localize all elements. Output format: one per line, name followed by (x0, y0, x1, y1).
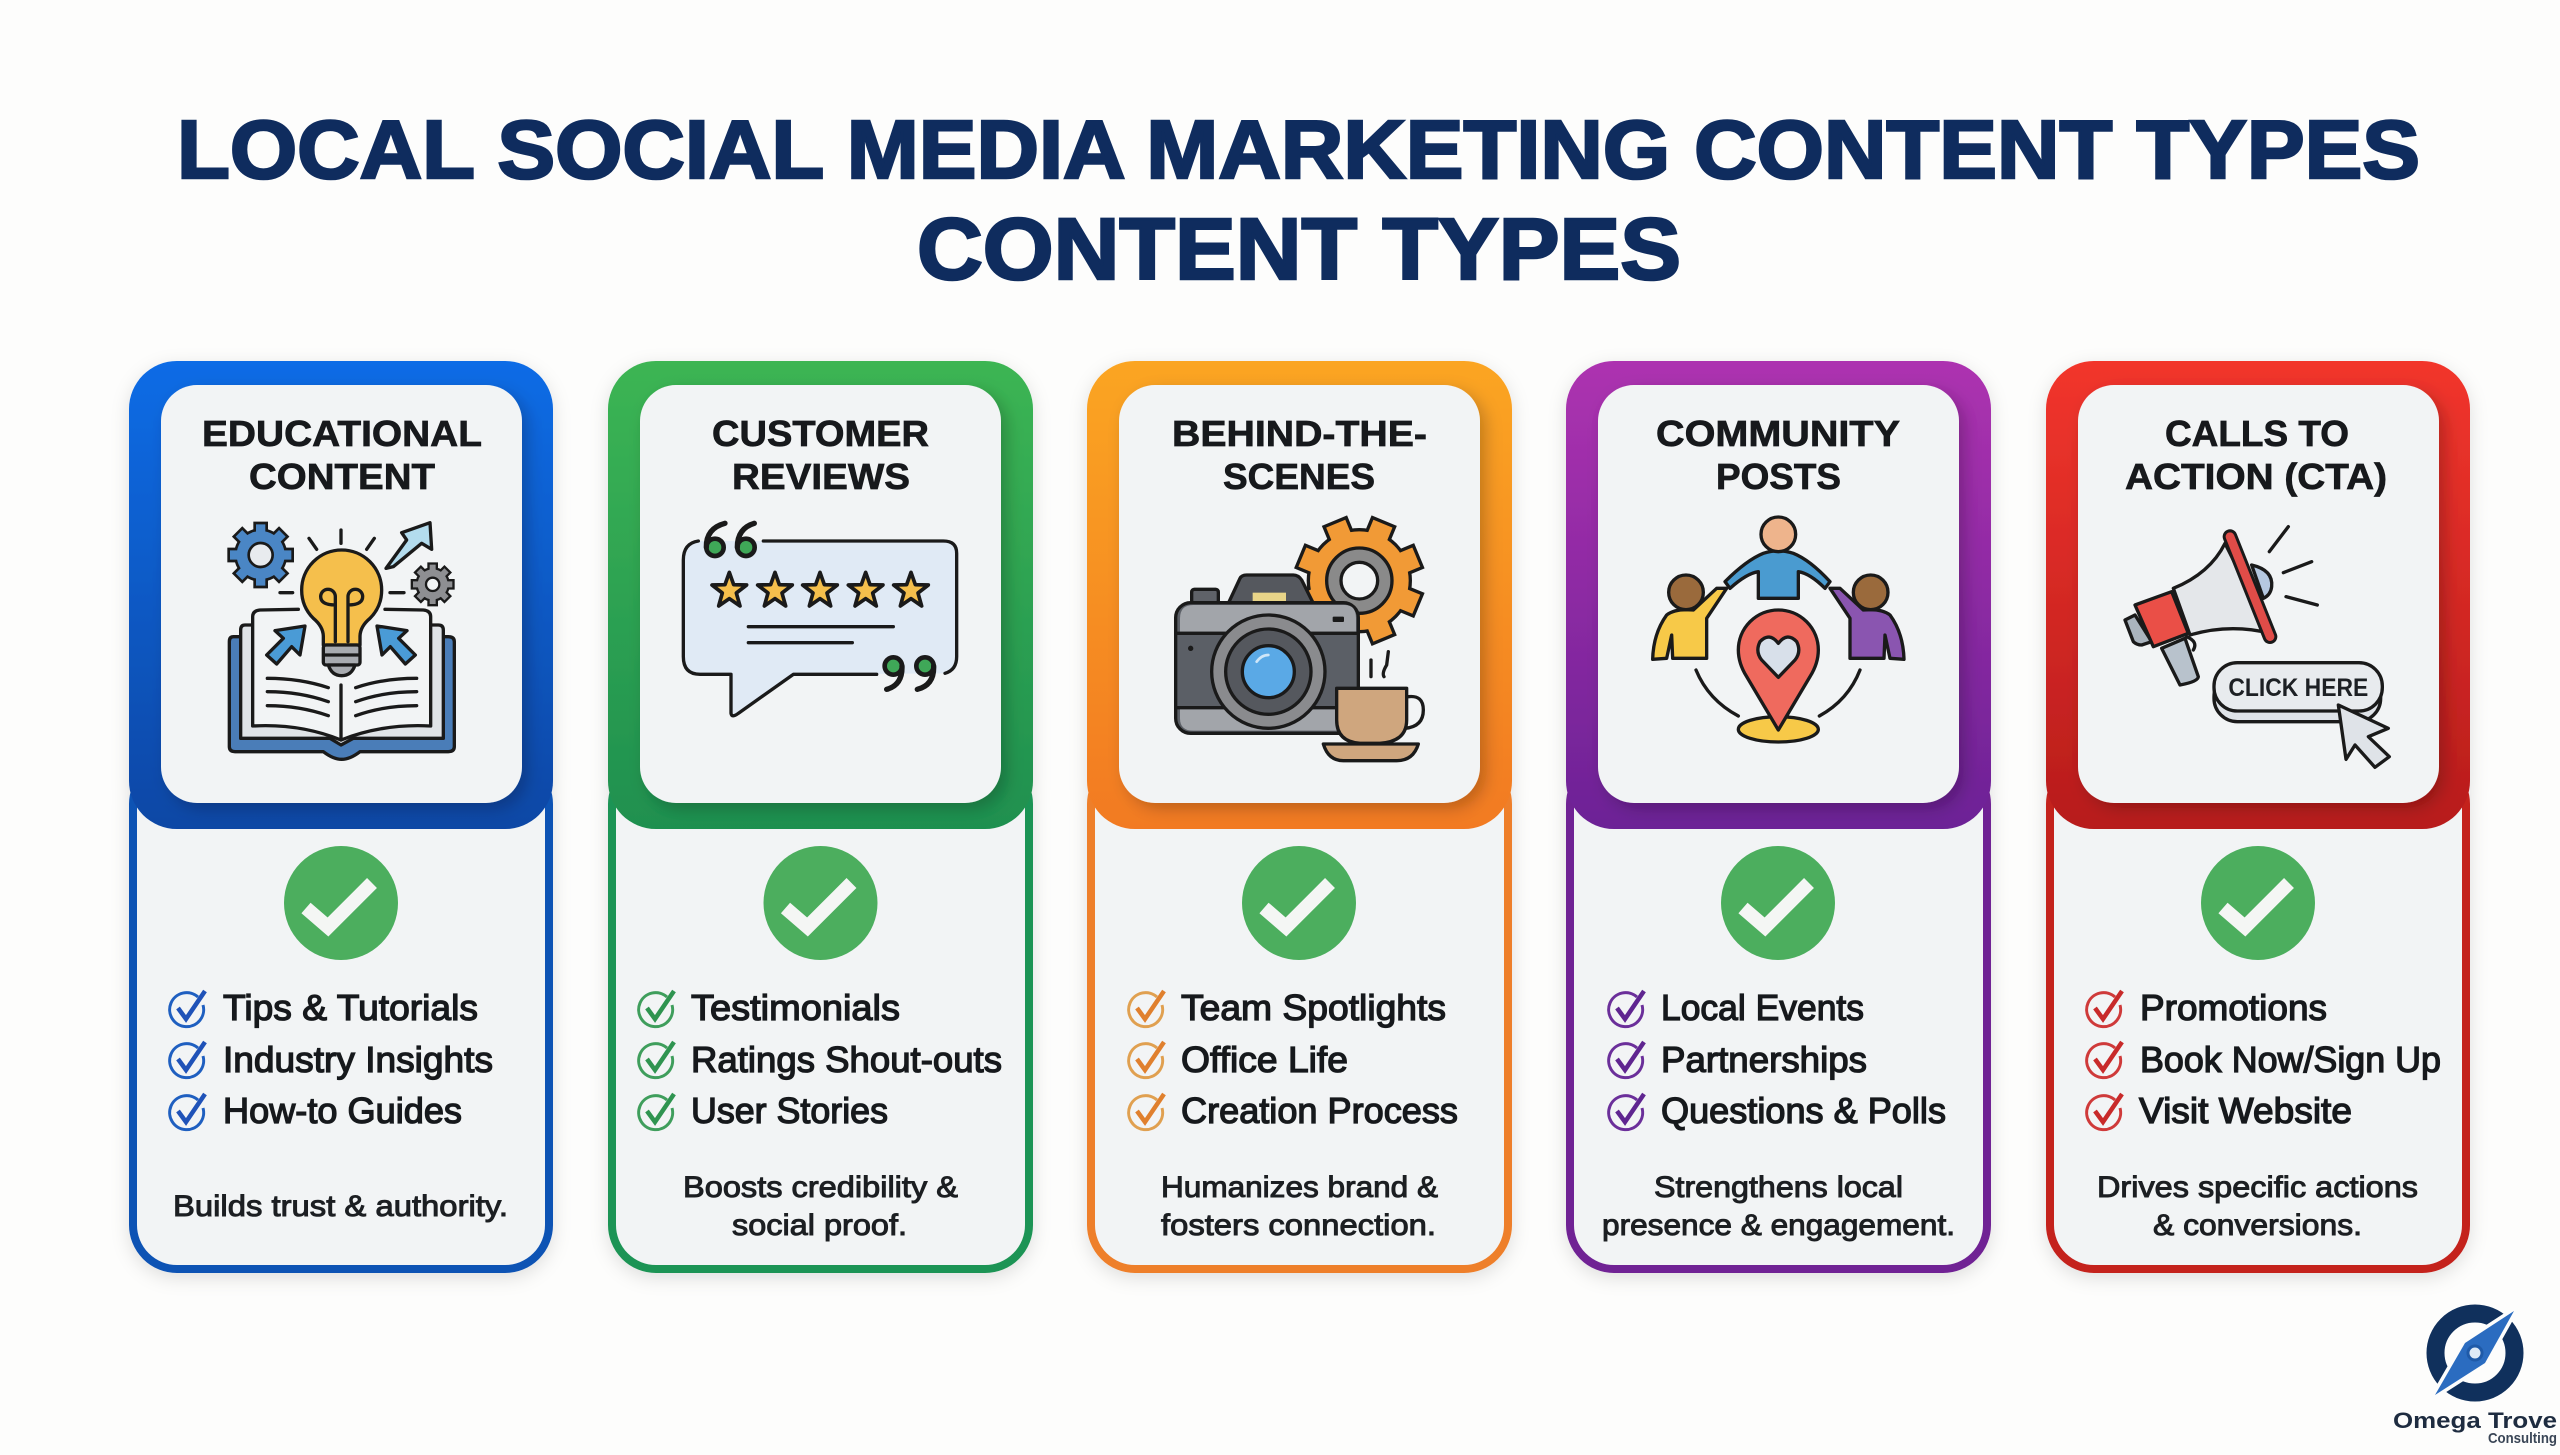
item: spotlights: Team Spotlights (1181, 987, 1446, 1028)
heading: BEHIND-THE- (1172, 413, 1427, 454)
heading: CUSTOMER (712, 413, 929, 454)
description: presence & engagement. (1602, 1209, 1955, 1242)
description (2097, 1171, 2418, 1242)
heading (712, 413, 929, 497)
icon: green check badge (764, 846, 878, 960)
card frame (1566, 361, 1991, 1269)
panel: calls to action (2046, 361, 2470, 1269)
description: Builds trust & authority. (173, 1190, 508, 1223)
item: promotions: Promotions (2140, 987, 2327, 1028)
item: partnerships: Partnerships (1661, 1039, 1867, 1080)
item: guides: How-to Guides (223, 1090, 462, 1131)
heading: CALLS TO (2165, 413, 2349, 454)
card frame (129, 361, 553, 1269)
item: stories: User Stories (691, 1090, 888, 1131)
item: tips: Tips & Tutorials (223, 987, 478, 1028)
title: CONTENT TYPES (917, 201, 1681, 298)
list: review items (639, 987, 1002, 1131)
heading: ACTION (CTA) (2125, 456, 2387, 497)
heading (2125, 413, 2387, 497)
heading: CONTENT (249, 456, 435, 497)
icon: camera, gear and coffee (1176, 521, 1428, 761)
item: insights: Industry Insights (223, 1039, 493, 1080)
icon: megaphone and click button: CLICK HERE (2228, 674, 2368, 702)
heading: COMMUNITY (1656, 413, 1900, 454)
heading: REVIEWS (732, 456, 910, 497)
icon: community with location pin (1653, 517, 1904, 742)
logo: Omega Trove Consulting (2393, 1311, 2557, 1447)
list: call to action items (2087, 987, 2441, 1131)
heading (1172, 413, 1427, 497)
description (1602, 1171, 1955, 1242)
heading: EDUCATIONAL (202, 413, 482, 454)
heading (202, 413, 482, 497)
logo text: Omega Trove (2393, 1408, 2557, 1433)
logo text (2393, 1408, 2557, 1447)
description: & conversions. (2153, 1209, 2362, 1242)
description (1161, 1171, 1438, 1242)
item: local events: Local Events (1661, 987, 1864, 1028)
panel: behind-the-scenes (1087, 361, 1512, 1269)
description: fosters connection. (1161, 1209, 1436, 1242)
list: behind-the-scenes items (1129, 987, 1458, 1131)
list: community items (1609, 987, 1946, 1131)
item: testimonials: Testimonials (691, 987, 900, 1028)
title: LOCAL SOCIAL MEDIA MARKETING CONTENT TYPES (177, 103, 2420, 196)
icon: green check badge (1721, 846, 1835, 960)
icon: book with lightbulb (227, 522, 455, 759)
description: Boosts credibility & (683, 1171, 958, 1204)
description: Strengthens local (1654, 1171, 1903, 1204)
description: Humanizes brand & (1161, 1171, 1438, 1204)
icon: compass ring (2435, 1311, 2514, 1395)
icon: review speech bubble (683, 523, 957, 716)
card frame (2046, 361, 2470, 1269)
item: ratings: Ratings Shout-outs (691, 1039, 1002, 1080)
item: visit website: Visit Website (2139, 1090, 2352, 1131)
heading: SCENES (1223, 456, 1375, 497)
icon: megaphone and click button (2125, 527, 2389, 767)
item: creation process: Creation Process (1181, 1090, 1458, 1131)
item: office life: Office Life (1181, 1039, 1348, 1080)
icon: green check badge (284, 846, 398, 960)
card frame (608, 361, 1033, 1269)
title (177, 103, 2420, 298)
description: social proof. (732, 1209, 907, 1242)
list: educational items (170, 987, 493, 1131)
panel: customer reviews (608, 361, 1033, 1269)
description (683, 1171, 958, 1242)
icon: green check badge (1242, 846, 1356, 960)
description: Drives specific actions (2097, 1171, 2418, 1204)
heading: POSTS (1716, 456, 1841, 497)
panel: community posts (1566, 361, 1991, 1269)
card frame (1087, 361, 1512, 1269)
icon: green check badge (2201, 846, 2315, 960)
item: book now: Book Now/Sign Up (2140, 1039, 2441, 1080)
item: questions: Questions & Polls (1661, 1090, 1946, 1131)
panel: educational content (129, 361, 553, 1269)
heading (1656, 413, 1900, 497)
